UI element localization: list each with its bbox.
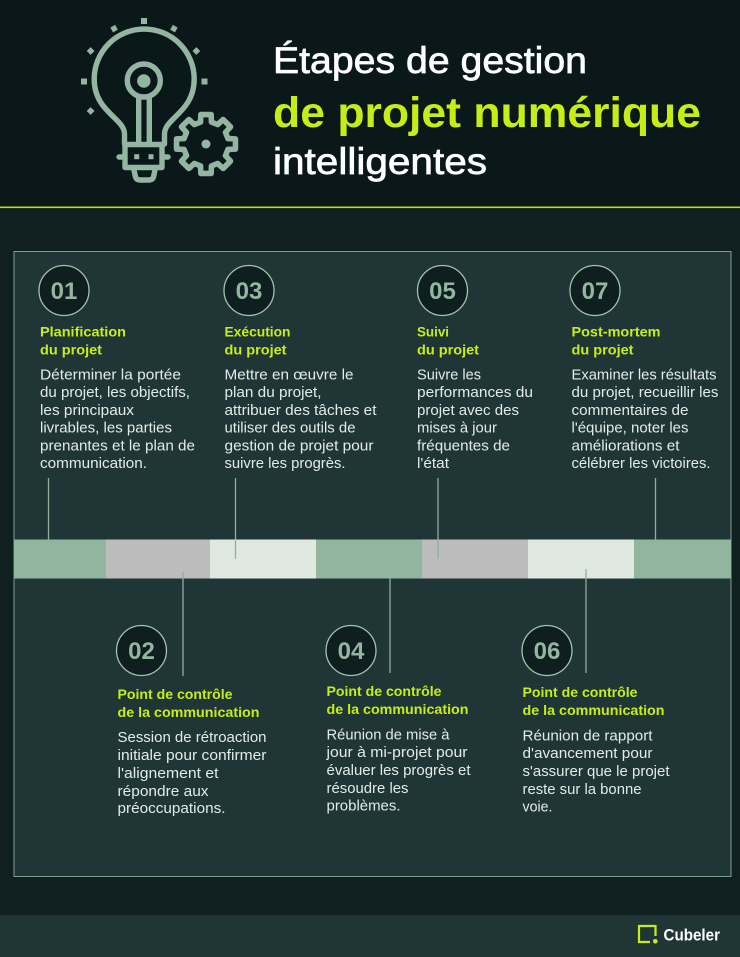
step 05: projet avec des [417, 403, 519, 419]
step 06: Réunion de rapport [522, 728, 652, 744]
step 03: plan du projet, [224, 385, 322, 401]
step 02: répondre aux [118, 784, 209, 800]
step 03: suivre les progrès. [224, 456, 346, 472]
step 01: du projet [40, 342, 102, 358]
step 04: évaluer les progrès et [326, 763, 470, 779]
step 01: prenantes et le plan de [40, 438, 195, 454]
step 03 [224, 266, 376, 472]
step 07: Examiner les résultats [572, 367, 716, 383]
title: de projet numérique [273, 89, 701, 137]
step 02 [116, 626, 267, 817]
step 07: commentaires de [572, 403, 688, 419]
step 03: Exécution [224, 324, 290, 340]
step 05: Suivre les [417, 367, 481, 383]
step 01 [39, 266, 195, 472]
step 01: Déterminer la portée [40, 367, 181, 383]
step 07: l'équipe, noter les [572, 421, 688, 437]
step 06: voie. [522, 800, 552, 816]
step 02: de la communication [118, 704, 260, 720]
step 06: reste sur la bonne [522, 782, 642, 798]
step 01: du projet, les objectifs, [40, 385, 190, 401]
step 06: de la communication [522, 702, 664, 718]
step 05: du projet [417, 342, 479, 358]
title: Étapes de gestion [273, 40, 587, 81]
step 05: l'état [417, 456, 449, 472]
title: intelligentes [273, 141, 487, 182]
step 03: du projet [224, 342, 287, 358]
step 04: Point de contrôle [326, 683, 442, 699]
step 04: 04 [338, 638, 365, 665]
step 04: jour à mi-projet pour [325, 745, 468, 761]
step 06: 06 [534, 638, 560, 665]
title [273, 40, 701, 182]
step 04 [325, 626, 470, 814]
step 03: 03 [236, 278, 262, 305]
step 07: 07 [582, 278, 608, 305]
connector lines over and below bar [183, 540, 586, 676]
panel: steps background [14, 252, 731, 876]
step 02: Session de rétroaction [118, 730, 266, 746]
step 07: du projet [572, 342, 634, 358]
step 01: 01 [51, 278, 77, 305]
step 06: d'avancement pour [522, 746, 653, 762]
step 03: utiliser des outils de [224, 421, 356, 437]
logo: Cubeler: Cubeler [664, 926, 720, 944]
step 07 [570, 266, 718, 472]
step 05: 05 [429, 278, 456, 305]
connector lines above bar [48, 478, 656, 540]
step 05: Suivi [417, 324, 449, 340]
step 03: attribuer des tâches et [224, 403, 376, 419]
step 05: performances du [417, 385, 533, 401]
step 05: mises à jour [417, 421, 497, 437]
step 05 [417, 266, 533, 472]
step 04: de la communication [326, 701, 468, 717]
step 02: Point de contrôle [118, 686, 233, 702]
logo: Cubeler [639, 925, 720, 944]
step 01: communication. [40, 456, 147, 472]
step 01: Planification [40, 324, 126, 340]
icon: light bulb with gear [81, 18, 235, 180]
step 06: s'assurer que le projet [522, 764, 670, 780]
step 05: fréquentes de [417, 438, 510, 454]
footer band [0, 915, 740, 957]
step 01: les principaux [40, 403, 135, 419]
step 02: 02 [128, 638, 155, 665]
step 02: préoccupations. [118, 801, 226, 817]
step 07: améliorations et [572, 438, 680, 454]
header band [0, 0, 740, 208]
timeline bar [14, 540, 731, 578]
step 04: Réunion de mise à [326, 727, 450, 743]
step 07: Post-mortem [572, 324, 660, 340]
step 03: Mettre en œuvre le [224, 367, 354, 383]
step 03: gestion de projet pour [224, 438, 374, 454]
step 07: du projet, recueillir les [572, 385, 718, 401]
step 06: Point de contrôle [522, 684, 638, 700]
step 01: livrables, les parties [40, 421, 172, 437]
step 02: l'alignement et [118, 766, 218, 782]
step 04: problèmes. [326, 798, 400, 814]
step 04: résoudre les [326, 781, 408, 797]
step 07: célébrer les victoires. [572, 456, 710, 472]
step 02: initiale pour confirmer [118, 748, 267, 764]
step 06 [522, 626, 670, 816]
